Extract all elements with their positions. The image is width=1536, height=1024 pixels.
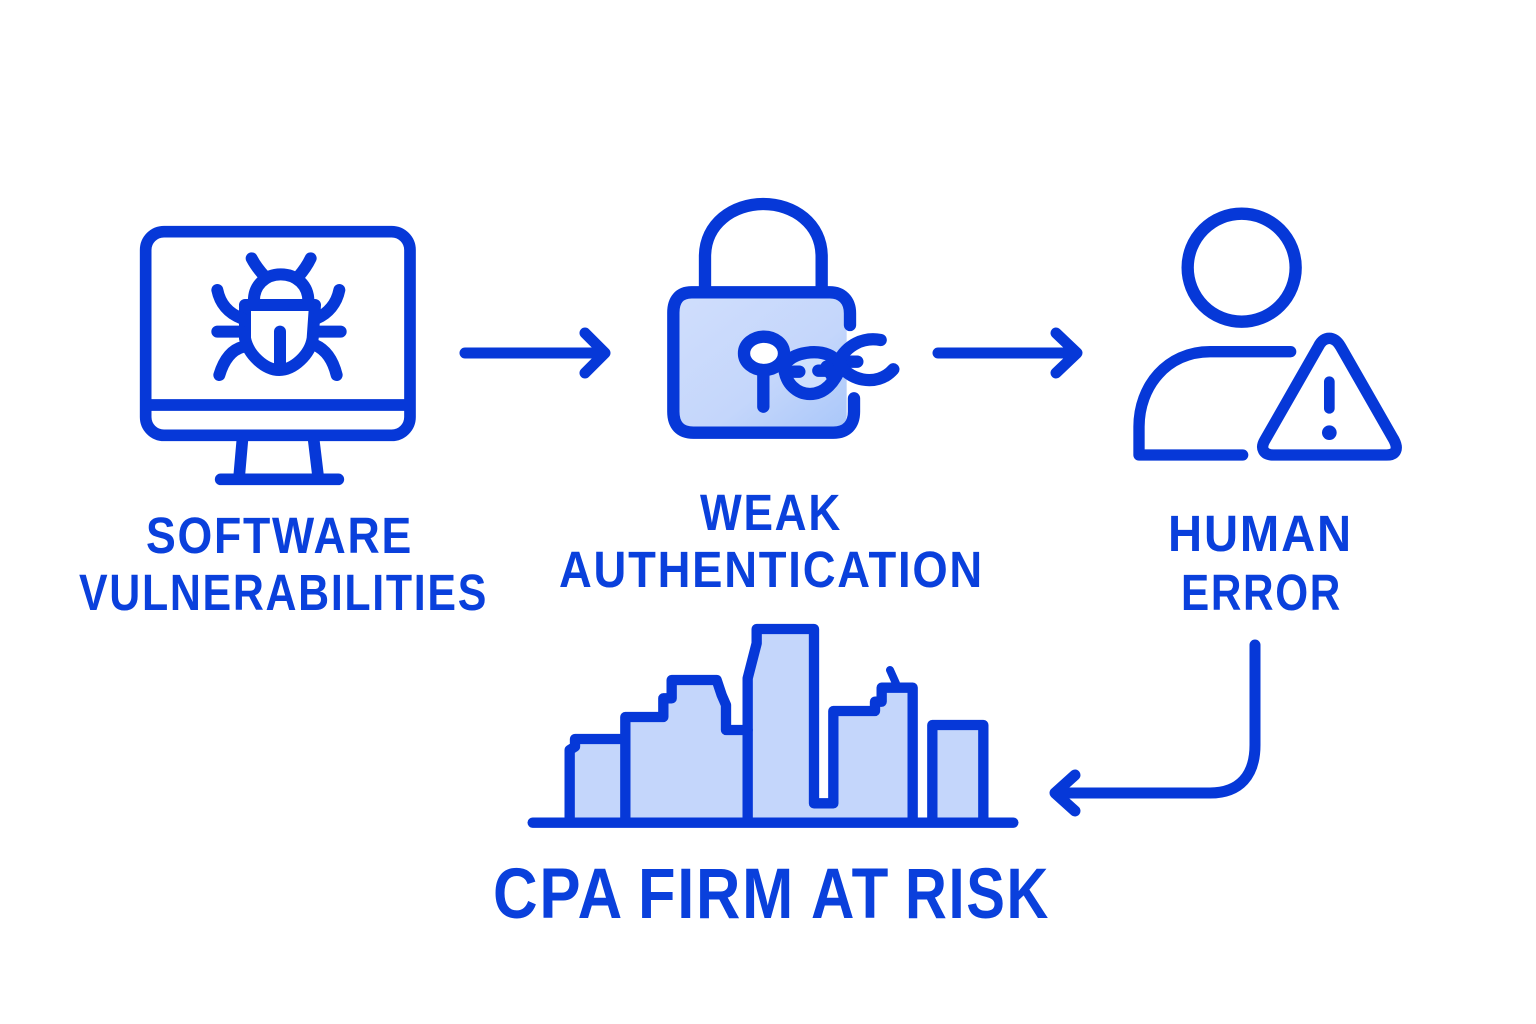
monitor frame [146,232,410,479]
icon: bug [217,258,341,375]
icon: person with warning triangle [1139,214,1396,455]
warning triangle [1263,338,1396,455]
arrow: software to authentication [465,333,605,373]
label: weak authentication: WEAK [700,484,842,541]
building fills [570,629,983,818]
title: CPA firm at risk: AT [811,855,890,934]
label: human error: HUMAN [1168,505,1353,562]
label: human error [1168,505,1353,621]
label: weak authentication [559,484,984,598]
label: software vulnerabilities: SOFTWARE [146,507,413,564]
icon: city skyline [533,629,1013,823]
label: human error: ERROR [1181,564,1342,621]
label: weak authentication: AUTHENTICATION [559,541,984,598]
title: CPA firm at risk: FIRM [638,855,795,934]
title: CPA firm at risk [493,855,1050,934]
arrow: human error to CPA firm [1055,645,1255,811]
lock body fill [675,295,847,430]
lock outline [673,204,854,433]
icon: broken padlock with chain [673,204,893,433]
label: software vulnerabilities: VULNERABILITIES [79,564,488,621]
building outlines [570,629,983,818]
label: software vulnerabilities [79,507,488,621]
ground line [533,807,1013,838]
icon: broken chain links [744,337,893,407]
arrow: authentication to human error [938,333,1077,373]
person head [1188,214,1296,322]
title: CPA firm at risk: RISK [905,855,1050,934]
icon: monitor with bug [146,232,410,479]
person shoulders [1139,352,1291,455]
title: CPA firm at risk: CPA [493,855,624,934]
